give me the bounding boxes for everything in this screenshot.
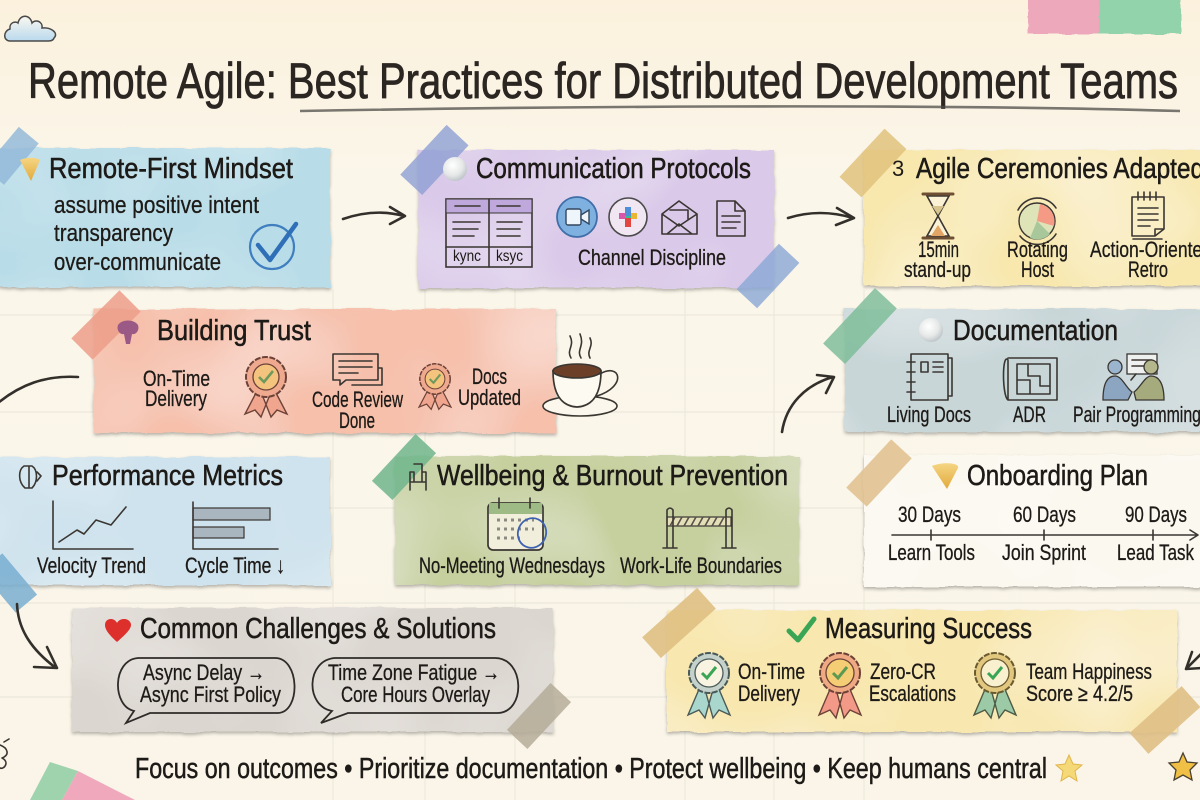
panel background (395, 456, 799, 585)
icon: star (1056, 755, 1082, 781)
arrow: metrics to challenges (17, 604, 57, 668)
tape (507, 683, 571, 749)
panel background (864, 455, 1200, 587)
panel background (0, 148, 330, 287)
list of mindset points: assume positive intent (54, 192, 259, 219)
decoration: cloud (5, 16, 56, 41)
badge: on-time delivery: On-Time (738, 659, 805, 684)
line chart: velocity (53, 501, 133, 549)
sync vs async table: ksyc (496, 248, 523, 265)
labels: Retro (1128, 257, 1168, 282)
heading: Remote-First Mindset (49, 153, 293, 185)
timeline: 30 Days (898, 502, 961, 527)
heading: Documentation (953, 315, 1118, 347)
panel: Communication Protocols (400, 125, 799, 308)
panel: Wellbeing & Burnout Prevention (372, 434, 799, 585)
label: docs updated: Updated (458, 385, 521, 410)
icon: notepad (1132, 192, 1164, 239)
panel: Common Challenges & Solutions (72, 608, 571, 749)
list of mindset points: over-communicate (54, 249, 221, 276)
panel background (94, 309, 556, 433)
heading: Onboarding Plan (967, 460, 1148, 492)
list of mindset points: transparency (54, 220, 173, 247)
label: code review done: Done (339, 408, 375, 433)
panel: Performance Metrics (0, 457, 330, 613)
icon: corner star (1169, 753, 1197, 780)
icon: sphere (443, 157, 467, 181)
tape (0, 553, 37, 613)
tape top (400, 125, 469, 195)
heading: Common Challenges & Solutions (140, 613, 496, 645)
speech bubble: async delay: Async First Policy (140, 682, 282, 707)
label: on-time delivery: Delivery (145, 386, 208, 411)
panel: Onboarding Plan (846, 439, 1200, 587)
labels: Host (1021, 257, 1055, 282)
icon: code review card (333, 354, 382, 385)
icon: blueprint (1004, 358, 1057, 400)
icon: head (20, 466, 41, 488)
labels (887, 402, 1200, 427)
badge: team happiness: Team Happiness (1026, 659, 1152, 684)
speech bubble: async delay (118, 658, 295, 723)
icon: video call (557, 197, 597, 237)
panel background (864, 150, 1200, 286)
labels: Velocity Trend (37, 553, 146, 578)
labels: No-Meeting Wednesdays (419, 553, 605, 578)
decoration: sticky notes top right (1028, 0, 1181, 34)
timeline: Join Sprint (1002, 540, 1087, 565)
icon: barrier (663, 508, 736, 548)
tape top (642, 588, 716, 658)
panel background (72, 608, 553, 732)
icon: small ribbon badge (419, 364, 451, 409)
panel background (418, 150, 774, 288)
arrow: up to documentation (782, 375, 834, 432)
labels: Rotating (1007, 237, 1068, 262)
icon: pin (118, 320, 138, 344)
bar chart: cycle time (193, 502, 278, 549)
icon: gold gem (932, 463, 958, 489)
icon: sphere (919, 318, 943, 342)
icon: calendar (488, 498, 551, 553)
icon: ribbon badge (245, 357, 287, 417)
panel: Remote-First Mindset (0, 127, 330, 287)
panel background (845, 309, 1200, 432)
arrow: curve from left to trust (0, 377, 78, 403)
icon: document (717, 201, 745, 236)
labels (904, 237, 1200, 282)
icon: chat app (609, 198, 647, 236)
tape bottom (1130, 686, 1200, 754)
badge: zero escalations (819, 653, 956, 718)
labels (419, 553, 782, 578)
decoration: washi tape bottom left (30, 762, 135, 800)
heading: Wellbeing & Burnout Prevention (437, 460, 788, 492)
decoration: doodle bottom left (0, 739, 9, 768)
badge: zero escalations: Escalations (869, 681, 956, 706)
badge: team happiness: Score ≥ 4.2/5 (1026, 681, 1133, 706)
speech bubble: time zone fatigue: Time Zone Fatigue → (328, 660, 500, 685)
list of mindset points (54, 192, 259, 276)
tape (0, 127, 39, 185)
label: on-time delivery (143, 366, 210, 411)
tape (823, 288, 897, 364)
icon: rotating host wheel (1018, 198, 1056, 244)
icon: numeral: 3 (892, 156, 904, 181)
labels: Cycle Time ↓ (185, 553, 285, 578)
labels: Work-Life Boundaries (620, 553, 782, 578)
icon: hourglass (923, 194, 953, 238)
icon: notebook (907, 354, 952, 400)
labels: stand-up (904, 257, 971, 282)
labels (37, 553, 285, 578)
icon: pair programming (1103, 354, 1164, 400)
arrow: mindset to communication (343, 207, 405, 224)
icon: blue check (250, 224, 296, 269)
icon: heart (105, 619, 131, 642)
sync vs async table: kync (453, 248, 481, 265)
title underline (300, 106, 1180, 111)
speech bubble: time zone fatigue (312, 658, 518, 723)
labels: 15min (918, 237, 959, 262)
panel background (667, 610, 1177, 732)
speech bubble: time zone fatigue: Core Hours Overlay (341, 682, 491, 707)
arrow: communication to ceremonies (788, 208, 854, 225)
label: docs updated: Docs (472, 364, 507, 389)
labels: Living Docs (887, 402, 971, 427)
tape (840, 129, 906, 197)
icon: green check (789, 619, 814, 640)
badge: on-time delivery (688, 653, 805, 718)
heading: Communication Protocols (476, 153, 751, 185)
icon: chair figure (410, 464, 426, 490)
labels: ADR (1013, 402, 1046, 427)
panel: Building Trust (71, 290, 556, 433)
panel: Documentation (823, 288, 1200, 432)
timeline: 60 Days (1013, 502, 1076, 527)
label: code review done: Code Review (312, 387, 404, 412)
label: code review done (312, 387, 404, 433)
panel background (0, 457, 330, 585)
tape (846, 439, 912, 507)
timeline: Learn Tools (888, 540, 975, 565)
icon: coffee cup (543, 334, 618, 416)
panel: Measuring Success (642, 588, 1200, 754)
speech bubble: async delay: Async Delay → (143, 660, 265, 685)
icon: envelope (662, 201, 697, 234)
label: on-time delivery: On-Time (143, 366, 210, 391)
badge: on-time delivery: Delivery (738, 681, 801, 706)
label: docs updated (458, 364, 521, 410)
heading: Performance Metrics (52, 460, 283, 492)
tape (71, 290, 141, 360)
heading: Measuring Success (825, 613, 1032, 645)
timeline (888, 502, 1198, 565)
label: Channel Discipline (578, 245, 726, 270)
tape (372, 434, 436, 500)
arrow: right edge pointer (1186, 652, 1200, 669)
badge: team happiness (974, 653, 1152, 718)
heading: Building Trust (157, 315, 311, 347)
sync vs async table (446, 199, 532, 267)
badge: zero escalations: Zero-CR (870, 659, 936, 684)
icon: yellow gem (20, 158, 40, 181)
tape bottom (737, 244, 799, 308)
panel: Agile Ceremonies Adapted (840, 129, 1200, 286)
